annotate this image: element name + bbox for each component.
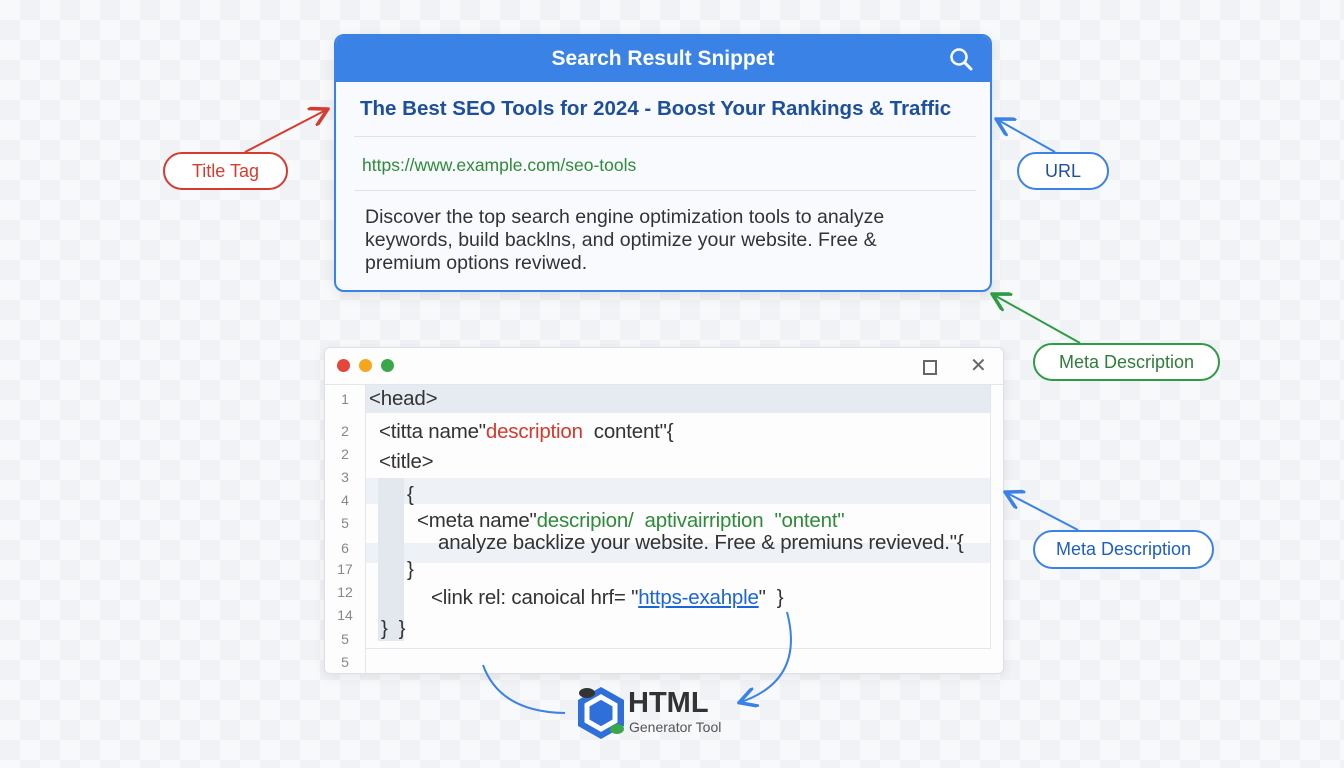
- callout: url: URL: [1045, 160, 1081, 180]
- panel: search result snippet: [334, 34, 992, 292]
- panel: code editor: [324, 347, 1004, 674]
- code: line numbers: 5: [341, 654, 349, 670]
- code: line numbers: 14: [337, 607, 353, 623]
- code: text: <meta name"descripion/ aptivairription "ontent": [417, 509, 844, 532]
- code: text: {: [407, 483, 414, 506]
- heading: snippet header: Search Result Snippet: [552, 47, 774, 70]
- code: line numbers: 17: [337, 561, 353, 577]
- callout: title tag: Title Tag: [192, 160, 259, 180]
- text: description: Discover the top search engine optimization tools to analyze keywords, build backlns, and optimize your website. Free & premium options reviwed.: [365, 206, 884, 274]
- callout: url: [1017, 152, 1109, 190]
- callout: title tag: [163, 152, 288, 190]
- code: text: analyze backlize your website. Free & premiuns revieved."{: [438, 531, 964, 554]
- code: text: [369, 387, 964, 640]
- callout: meta description (blue): Meta Description: [1056, 539, 1191, 559]
- code: line numbers: 2: [341, 446, 349, 462]
- code: line numbers: [337, 391, 353, 670]
- callout: meta description (blue): [1033, 530, 1214, 569]
- code: text: <head>: [369, 387, 437, 410]
- code: text: <titta name"description content"{: [379, 420, 673, 443]
- text: url: https://www.example.com/seo-tools: [362, 155, 636, 175]
- text: title tag: The Best SEO Tools for 2024 - Boost Your Rankings & Traffic: [360, 97, 951, 120]
- code: text: <title>: [379, 450, 433, 473]
- code: text: <link rel: canoical hrf= "https-exahple" }: [431, 586, 783, 609]
- code: line numbers: 12: [337, 584, 353, 600]
- code: text: }: [407, 558, 414, 581]
- callout: meta description (green): Meta Description: [1059, 352, 1194, 372]
- icon: window controls: [923, 355, 987, 377]
- code: line numbers: 4: [341, 492, 349, 508]
- callout: meta description (green): [1033, 343, 1220, 381]
- code: line numbers: 5: [341, 515, 349, 531]
- logo: HTML generator tool: HTML: [628, 687, 709, 719]
- icon: window controls: ✕: [970, 355, 987, 377]
- code: line numbers: 2: [341, 423, 349, 439]
- code: line numbers: 3: [341, 469, 349, 485]
- icon: search: [950, 48, 973, 71]
- icon: window dots: [337, 359, 394, 372]
- logo: HTML generator tool: [578, 687, 721, 739]
- code: line numbers: 1: [341, 391, 349, 407]
- code: line numbers: 5: [341, 631, 349, 647]
- logo: HTML generator tool: Generator Tool: [629, 719, 721, 735]
- code: line numbers: 6: [341, 540, 349, 556]
- code: text: } }: [381, 617, 405, 640]
- icon: hexagon: [578, 687, 624, 739]
- heading: snippet header: [336, 36, 990, 82]
